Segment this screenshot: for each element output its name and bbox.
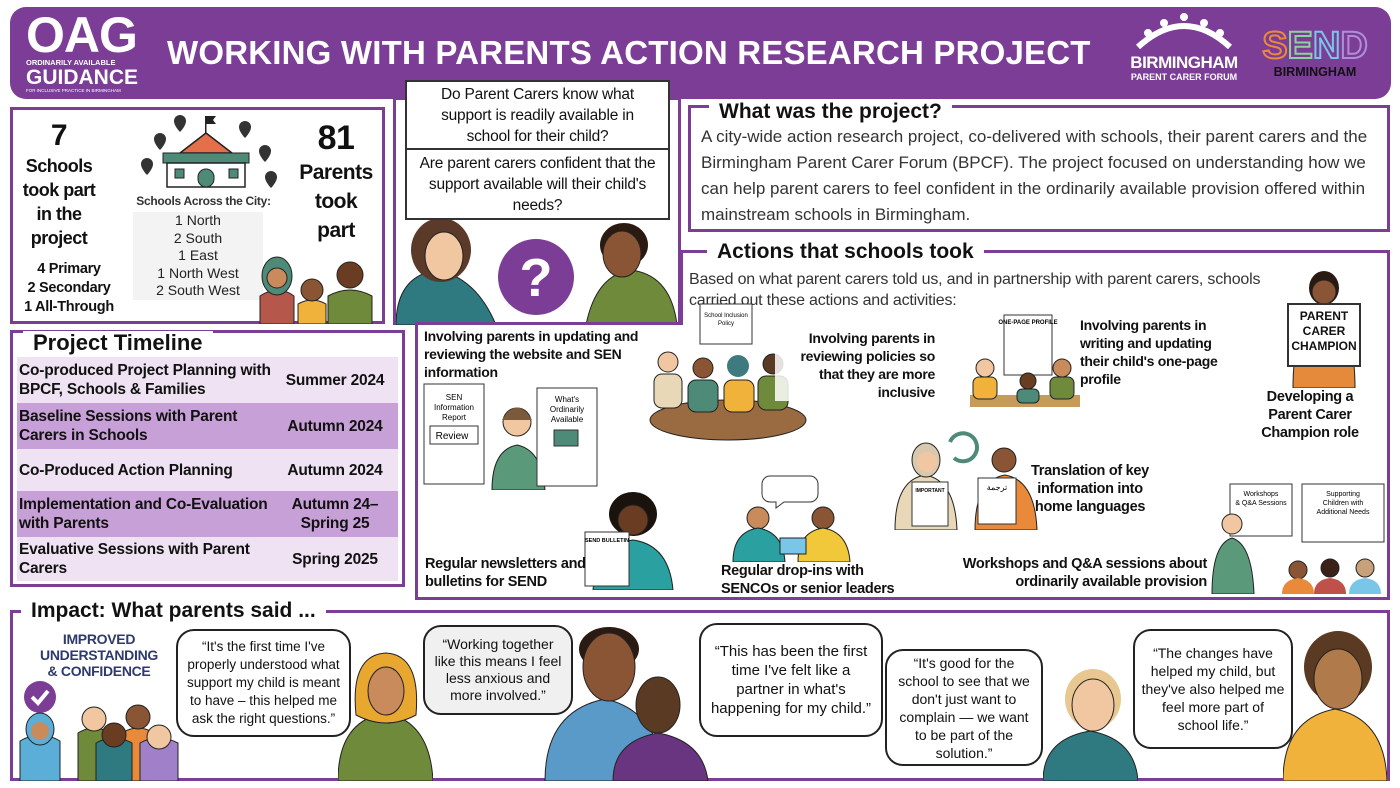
row 5: Spring 2025 <box>292 550 378 568</box>
icon: school with pins <box>141 115 277 188</box>
illustration: newsletter <box>584 492 674 590</box>
badge: improved understanding: UNDERSTANDING <box>40 647 158 663</box>
row 4 <box>17 491 398 537</box>
action: parent carer champion: Developing a Parent Carer Champion role <box>1261 389 1359 441</box>
stat: 81 parents: 81 <box>318 119 354 157</box>
illustration: website documents: Report <box>442 413 467 422</box>
stat: 7 schools: 7 <box>51 119 67 152</box>
text: project description: A city-wide action research project, co-delivered with schools, their parent carers and the Birmingham Parent Carer Forum (BPCF). The project focused on understanding how we can help parent carers to feel confident in the ordinarily available provision offered within mainstream schools in Birmingham. <box>701 127 1367 224</box>
illustration: translation: ترجمة <box>987 483 1007 492</box>
panel: stats: 2 South <box>174 230 222 246</box>
illustration: website documents <box>424 384 598 490</box>
row 2 <box>17 403 398 449</box>
illustration: translation <box>894 431 1038 530</box>
title: WORKING WITH PARENTS ACTION RESEARCH PROJECT <box>167 34 1091 71</box>
logo: Birmingham Parent Carer Forum <box>1130 13 1238 82</box>
row 3: Autumn 2024 <box>287 462 383 478</box>
action: workshops: Workshops and Q&A sessions about ordinarily available provision <box>963 556 1207 590</box>
logo: OAG: OAG <box>26 7 137 63</box>
action: newsletters: Regular newsletters and bulletins for SEND <box>425 556 586 590</box>
action: policies: Involving parents in reviewing policies so that they are more inclusive <box>800 330 935 400</box>
stat: 81 parents: Parents took part <box>299 161 373 242</box>
illustration: translation: IMPORTANT <box>915 488 945 494</box>
illustration: father and son <box>544 627 708 781</box>
logo: OAG: FOR INCLUSIVE PRACTICE IN BIRMINGHAM <box>26 88 121 93</box>
illustration: woman in yellow <box>1283 631 1387 781</box>
illustration: website documents: Ordinarily <box>550 405 584 414</box>
illustration: workshops: Workshops <box>1244 491 1279 498</box>
question box: Do Parent Carers know what support is readily available in school for their child? <box>441 86 634 145</box>
quote 2: “Working together like this means I feel less anxious and more involved.” <box>435 636 561 703</box>
row 3 <box>17 449 398 491</box>
illustration: parent carer champion <box>1287 271 1361 388</box>
text: intro: Based on what parent carers told us, and in partnership with parent carers, schools carried out these actions and activities: <box>689 271 1260 309</box>
row 4: Autumn 24– <box>292 496 378 513</box>
panel: actions that schools took <box>415 240 1390 600</box>
illustration: website documents: What's <box>555 395 579 404</box>
badge: improved understanding <box>40 631 158 679</box>
panel: stats: 1 East <box>178 247 218 263</box>
illustration: website documents: Information <box>434 403 474 412</box>
panel: questions <box>393 97 681 325</box>
illustration: woman in hijab <box>338 652 433 781</box>
logo: Birmingham Parent Carer Forum: PARENT CARER FORUM <box>1131 72 1237 82</box>
row 5: Evaluative Sessions with Parent Carers <box>19 541 250 577</box>
school types: 4 Primary <box>37 261 101 277</box>
row 1: Co-produced Project Planning with BPCF, Schools & Families <box>19 362 271 398</box>
text: schools across the city: Schools Across the City: <box>136 194 271 208</box>
badge: improved understanding: & CONFIDENCE <box>48 663 150 679</box>
logo: SEND Birmingham <box>1262 30 1368 79</box>
row 1 <box>17 357 398 403</box>
illustration: website documents: Review <box>436 431 469 442</box>
action: website: Involving parents in updating and reviewing the website and SEN information <box>424 328 638 380</box>
question box: Are parent carers confident that the support available will their child's needs? <box>420 155 655 214</box>
school types: 2 Secondary <box>28 280 110 296</box>
panel: stats: 1 North <box>175 212 221 228</box>
row 1: Summer 2024 <box>286 372 384 388</box>
panel: what was the project <box>688 105 1390 232</box>
quote 4: “It's good for the school to see that we don't just want to complain — we want to be part of the solution.” <box>898 654 1030 760</box>
question box <box>405 80 670 220</box>
row 4: Spring 25 <box>301 515 369 532</box>
logo: SEND Birmingham: BIRMINGHAM <box>1274 65 1356 79</box>
quote 2 <box>423 625 573 715</box>
logo: OAG: ORDINARILY AVAILABLE <box>26 58 115 67</box>
illustration: group thumbs up <box>20 681 178 781</box>
illustration: thinking parents with question mark: ? <box>520 248 552 308</box>
illustration: policy meeting: School Inclusion <box>704 313 748 319</box>
heading: impact: Impact: What parents said ... <box>31 599 316 622</box>
action: drop-ins: Regular drop-ins with SENCOs or senior leaders <box>721 563 894 597</box>
panel: project timeline <box>10 330 405 587</box>
row 5 <box>17 537 398 581</box>
illustration: woman with short hair <box>1043 669 1138 781</box>
heading: what was the project: What was the project? <box>719 100 942 123</box>
heading: actions: Actions that schools took <box>717 240 974 263</box>
action: translation: Translation of key information into home languages <box>1031 463 1149 515</box>
illustration: policy meeting: Policy <box>718 321 734 327</box>
quote 5 <box>1133 629 1293 749</box>
illustration: website documents: SEN <box>446 393 462 402</box>
illustration: website documents: Available <box>551 415 584 424</box>
quote 3 <box>699 623 883 737</box>
quote 3: “This has been the first time I've felt like a partner in what's happening for my child.” <box>711 643 871 717</box>
action: one-page profile: Involving parents in writing and updating their child's one-page profile <box>1080 317 1218 387</box>
logo: OAG: GUIDANCE <box>26 66 138 89</box>
logo: OAG <box>26 7 138 93</box>
illustration: workshops: Children with <box>1323 500 1363 507</box>
heading: project timeline: Project Timeline <box>33 330 203 355</box>
panel: impact <box>10 610 1390 781</box>
logo: Birmingham Parent Carer Forum: BIRMINGHAM <box>1130 53 1238 72</box>
stat: 7 schools: Schools took part in the project <box>23 156 95 248</box>
header banner <box>10 7 1391 99</box>
row 2: Autumn 2024 <box>287 418 383 434</box>
quote 1: “It's the first time I've properly understood what support my child is meant to have – this helped me ask the right questions.” <box>187 639 340 726</box>
illustration: one page profile <box>970 314 1080 407</box>
illustration: policy meeting <box>650 304 806 440</box>
illustration: workshops: Additional Needs <box>1317 509 1370 516</box>
panel: stats: 1 North West <box>157 264 239 280</box>
illustration: thinking parents with question mark <box>396 220 677 325</box>
badge: improved understanding: IMPROVED <box>63 631 135 647</box>
panel: stats: 2 South West <box>156 282 240 298</box>
panel frame <box>680 250 1390 600</box>
illustration: workshops: & Q&A Sessions <box>1235 500 1287 507</box>
illustration: one page profile: ONE-PAGE PROFILE <box>998 320 1058 326</box>
quote 5: “The changes have helped my child, but they've also helped me feel more part of school life.” <box>1142 645 1284 733</box>
illustration: family <box>260 256 372 324</box>
row 2: Baseline Sessions with Parent Carers in Schools <box>19 408 237 444</box>
row 3: Co-Produced Action Planning <box>19 462 233 478</box>
school types: 1 All-Through <box>24 299 114 315</box>
illustration: newsletter: SEND BULLETIN <box>585 538 629 544</box>
illustration: parent carer champion: PARENT CARER CHAMPION <box>1291 309 1357 353</box>
school types <box>24 261 114 315</box>
illustration: workshops <box>1212 484 1384 594</box>
illustration: drop-ins <box>732 476 850 562</box>
stat: 81 parents <box>299 119 373 242</box>
illustration: workshops: Supporting <box>1326 491 1360 498</box>
row 4: Implementation and Co-Evaluation with Parents <box>19 496 268 532</box>
panel: stats <box>10 107 385 324</box>
